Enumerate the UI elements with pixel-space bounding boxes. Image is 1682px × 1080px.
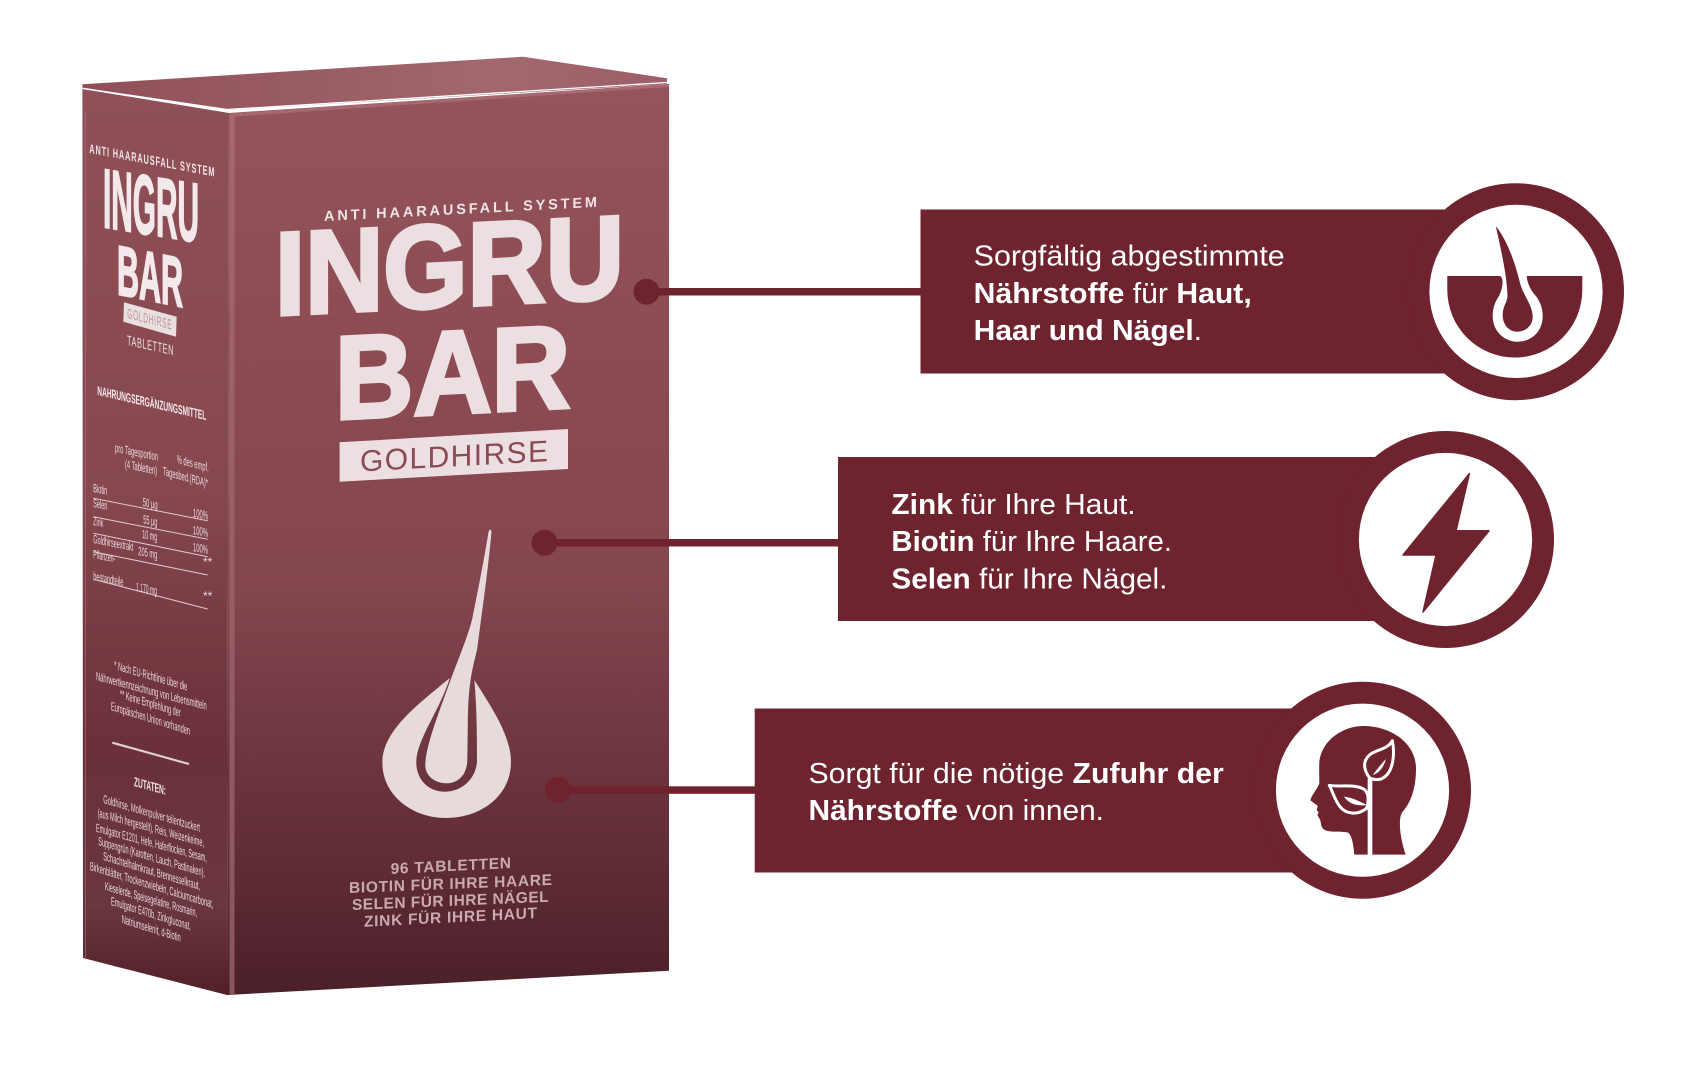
claims text on box [349, 855, 552, 931]
panel 1 text: Nährstoffe für Haut, [974, 278, 1252, 310]
panel 2 text: Zink für Ihre Haut. [891, 489, 1136, 521]
box top face [82, 57, 667, 110]
box top edge highlight [82, 82, 667, 110]
callout 1: nutrients [634, 183, 1624, 400]
nutrition table: 50 µg [143, 495, 158, 512]
footnotes [96, 658, 207, 764]
nutrition table: (4 Tabletten) [125, 457, 157, 478]
nutrition table: 100% [193, 540, 208, 557]
box side face [82, 89, 229, 995]
ingredients: Goldhirse, Molkenpulver teilentzuckert [103, 792, 200, 835]
ingredients: ZUTATEN: [134, 774, 166, 798]
nutrition table: pro Tagesportion [115, 441, 158, 464]
panel 2 text: Biotin für Ihre Haare. [891, 526, 1172, 558]
nutrition table: Goldhirseextrakt [93, 532, 134, 554]
nutrition table [93, 441, 213, 609]
nutrition table: 55 µg [143, 512, 157, 529]
connector line 1 [634, 279, 922, 305]
panel 1 text: Haar und Nägel. [974, 315, 1202, 347]
box side face: Suppengrün (Karotten, Lauch, Pastinaken), [98, 834, 205, 880]
nutrition table: Tagesbed.(RDA)* [163, 464, 208, 490]
connector line 3 [545, 777, 758, 803]
panel 3 [755, 682, 1471, 899]
ingredients: Natriumselenit, d-Biotin [122, 912, 181, 945]
footnotes: * Nach EU-Richtlinie über die [114, 658, 187, 694]
ingredients: Kieselerde, Speisegelatine, Rosmarin, [105, 879, 197, 920]
panel 3 text [808, 758, 1224, 827]
callout 2: minerals [532, 431, 1554, 648]
product box [82, 57, 669, 995]
icon: head with plant [1311, 726, 1416, 855]
front tagline: ANTI HAARAUSFALL SYSTEM [324, 195, 597, 225]
nutrition table: 205 mg [138, 544, 157, 562]
label: GOLDHIRSE: GOLDHIRSE [360, 435, 548, 478]
panel 1 [920, 183, 1624, 400]
nutrition table: Zink [93, 514, 104, 530]
side brand text: ANTI HAARAUSFALL SYSTEM [89, 141, 215, 180]
side brand text: GOLDHIRSE [127, 306, 172, 334]
panel 3 text: Nährstoffe von innen. [808, 795, 1104, 827]
nutrition table: Biotin [93, 481, 107, 498]
connector line 2 [532, 530, 840, 556]
panel 2 text [891, 489, 1172, 596]
nutrition table: ** [203, 555, 213, 569]
ingredients: Emulgator E470b, Zinkgluconat, [111, 894, 191, 933]
icon: hair follicle logo [382, 530, 511, 818]
callout 3: supply from within [545, 682, 1471, 899]
footnotes: ** Keine Empfehlung der [120, 687, 181, 720]
ingredients: Schachtelhalmkraut, Brennesselkraut, [103, 849, 200, 893]
nutrition table: ** [203, 589, 213, 603]
panel 1 text: Sorgfältig abgestimmte [974, 241, 1285, 273]
box front face [227, 84, 669, 995]
side brand text: BAR [117, 231, 183, 322]
claims text on box: BIOTIN FÜR IHRE HAARE [349, 872, 552, 897]
icon: hair root [1447, 226, 1582, 358]
panel 2 [838, 431, 1554, 648]
icon: lightning bolt [1403, 474, 1489, 612]
nutrition table: 1.170 mg [136, 580, 157, 598]
nutrition table: % des empf. [177, 452, 209, 475]
ingredients: (aus Milch hergestellt), Reis, Weizenkeime, [98, 806, 204, 850]
claims text on box: 96 TABLETTEN [391, 855, 511, 878]
box side face: Nährwertkennzeichnung von Lebensmitteln [96, 669, 207, 713]
panel 3 text: Sorgt für die nötige Zufuhr der [808, 758, 1224, 790]
side brand text: NAHRUNGSERGÄNZUNGSMITTEL [97, 383, 206, 423]
nutrition table: Pflanzen- [93, 547, 115, 565]
label: GOLDHIRSE [340, 429, 568, 482]
box side face: Emulgator E1201, Hefe, Haferflocken, Sesam, [96, 821, 207, 865]
side brand text: TABLETTEN [127, 333, 174, 359]
nutrition table: bestandteile [93, 569, 123, 589]
panel 2 text: Selen für Ihre Nägel. [891, 564, 1167, 596]
ingredients [90, 774, 213, 945]
logo: BAR: BAR [335, 301, 570, 445]
panel 1 text [974, 241, 1285, 347]
logo: INGRU: INGRU [275, 192, 624, 341]
nutrition table: 100% [193, 523, 208, 540]
product box: INGRU [103, 150, 199, 260]
nutrition table: Selen [93, 496, 107, 513]
footnotes: Europäischen Union vorhanden [111, 699, 190, 738]
nutrition table: 100% [193, 506, 208, 523]
claims text on box: ZINK FÜR IHRE HAUT [364, 905, 538, 931]
side brand text [89, 141, 215, 423]
nutrition table: 10 mg [142, 527, 157, 544]
box side face: Birkenblätter, Trockenzwiebeln, Calciumcarbonat, [90, 859, 213, 911]
claims text on box: SELEN FÜR IHRE NÄGEL [352, 889, 549, 914]
